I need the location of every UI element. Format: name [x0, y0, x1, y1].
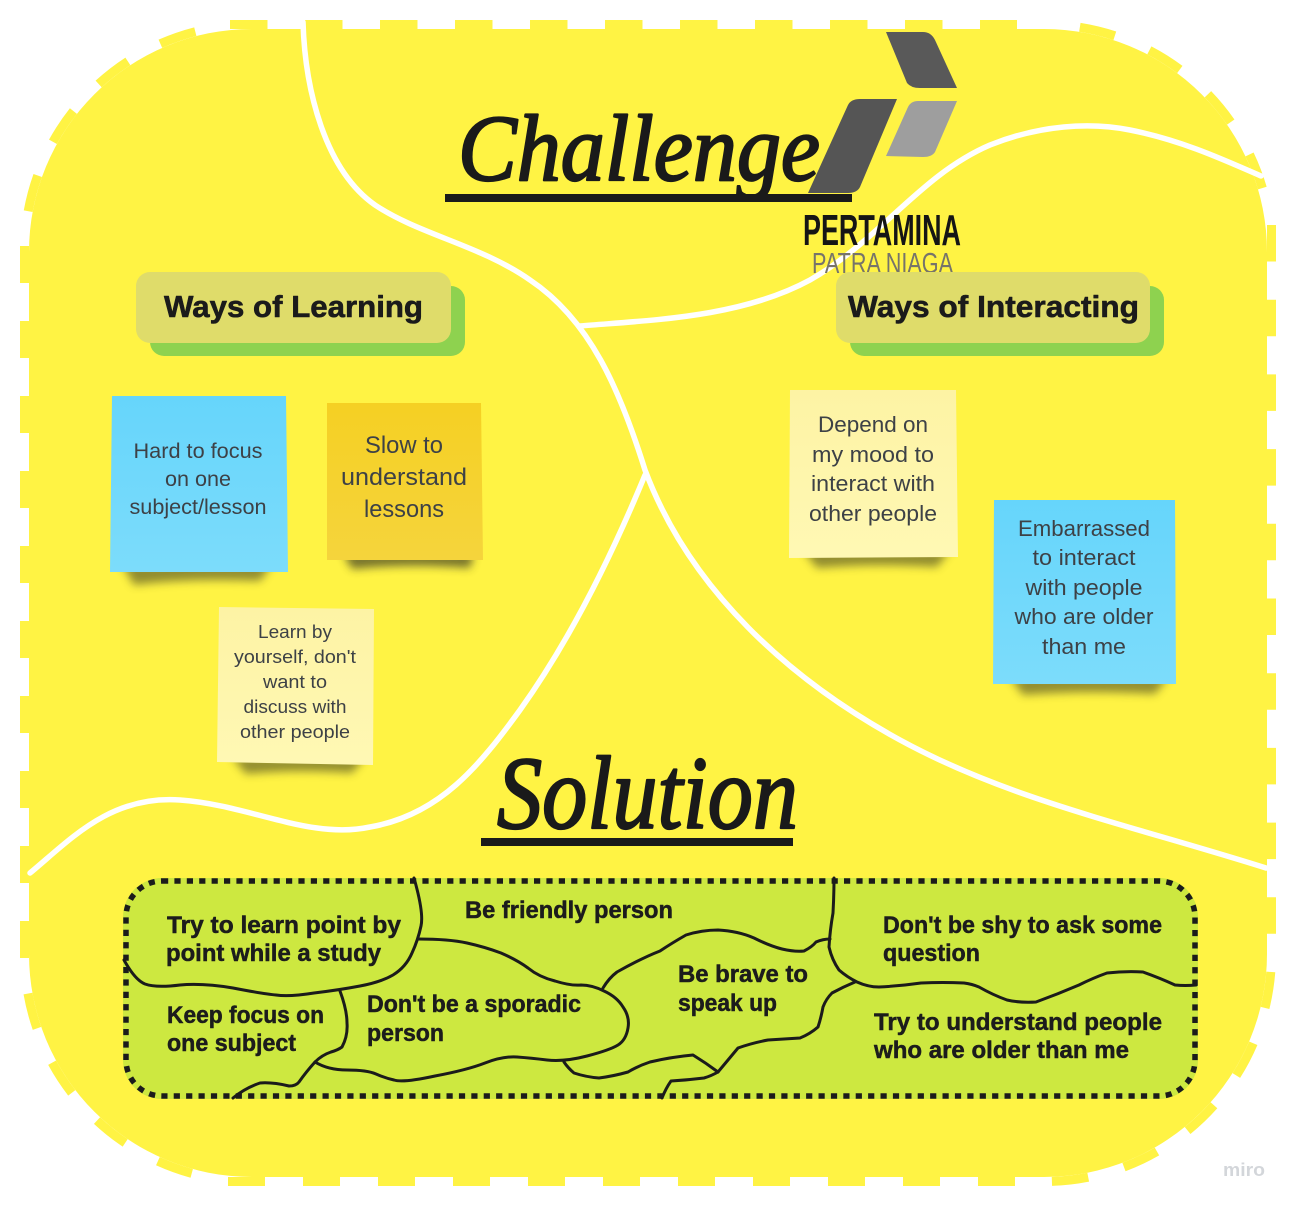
sticky note: hard to focus: subject/lesson [130, 495, 266, 519]
sticky note: embarrassed to interact: to interact [1032, 545, 1136, 570]
solution: keep focus: one subject [167, 1030, 296, 1057]
logo: Pertamina Patra Niaga: PERTAMINA [803, 206, 961, 255]
sticky note: embarrassed to interact: who are older [1013, 604, 1154, 629]
sticky note: depend on mood: my mood to [812, 442, 934, 467]
sticky note: learn by yourself: Learn by [258, 621, 333, 642]
title: Challenge: Challenge [458, 97, 820, 201]
solution: don't be shy: Don't be shy to ask some [883, 912, 1162, 939]
sticky note: hard to focus [110, 396, 288, 585]
solution: don't be sporadic: person [367, 1020, 444, 1047]
solution: be brave: speak up [678, 990, 777, 1017]
panel: solution box [123, 878, 1198, 1099]
sticky note: learn by yourself: want to [262, 671, 327, 692]
sticky note: depend on mood: interact with [811, 471, 935, 496]
solution: try to learn point by point: point while a study [166, 940, 381, 967]
logo: Pertamina Patra Niaga [803, 32, 961, 280]
solution: be friendly: Be friendly person [465, 897, 673, 924]
logo: Pertamina Patra Niaga: PATRA NIAGA [812, 248, 953, 280]
sticky note: embarrassed to interact: than me [1042, 634, 1126, 659]
solution: try to understand: who are older than me [873, 1037, 1129, 1064]
sticky note: depend on mood: Depend on [818, 412, 928, 437]
sticky note: learn by yourself [217, 607, 374, 774]
sticky note: depend on mood: other people [809, 501, 937, 526]
watermark: miro: miro [1223, 1159, 1265, 1180]
sticky note: embarrassed to interact [993, 500, 1176, 695]
solution: try to understand: Try to understand people [874, 1009, 1162, 1036]
solution: be brave: Be brave to [678, 961, 808, 988]
sticky note: embarrassed to interact: with people [1024, 575, 1142, 600]
white branching lines [30, 22, 1266, 873]
title: Solution: Solution [497, 736, 798, 851]
solution: don't be sporadic: Don't be a sporadic [367, 991, 581, 1018]
solution: try to learn point by point: Try to learn point by [167, 912, 401, 939]
heading: Ways of Learning [136, 272, 465, 356]
sticky note: slow to understand: understand [341, 464, 467, 491]
sticky note: slow to understand: lessons [364, 496, 444, 523]
sticky note: learn by yourself: discuss with [244, 696, 346, 717]
sticky note: hard to focus: on one [165, 467, 231, 491]
heading: Ways of Interacting: Ways of Interacting [848, 289, 1139, 324]
sticky note: depend on mood [789, 390, 958, 568]
hand-drawn dividing curves [124, 878, 1196, 1098]
sticky note: learn by yourself: yourself, don't [234, 646, 356, 667]
solution: keep focus: Keep focus on [167, 1002, 324, 1029]
sticky note: slow to understand [327, 403, 483, 569]
sticky note: slow to understand: Slow to [365, 432, 443, 459]
sticky note: learn by yourself: other people [240, 721, 350, 742]
solution: don't be shy: question [883, 940, 980, 967]
sticky note: embarrassed to interact: Embarrassed [1018, 516, 1150, 541]
heading: Ways of Learning: Ways of Learning [164, 289, 423, 324]
heading: Ways of Interacting [836, 272, 1164, 356]
sticky note: hard to focus: Hard to focus [134, 439, 262, 463]
